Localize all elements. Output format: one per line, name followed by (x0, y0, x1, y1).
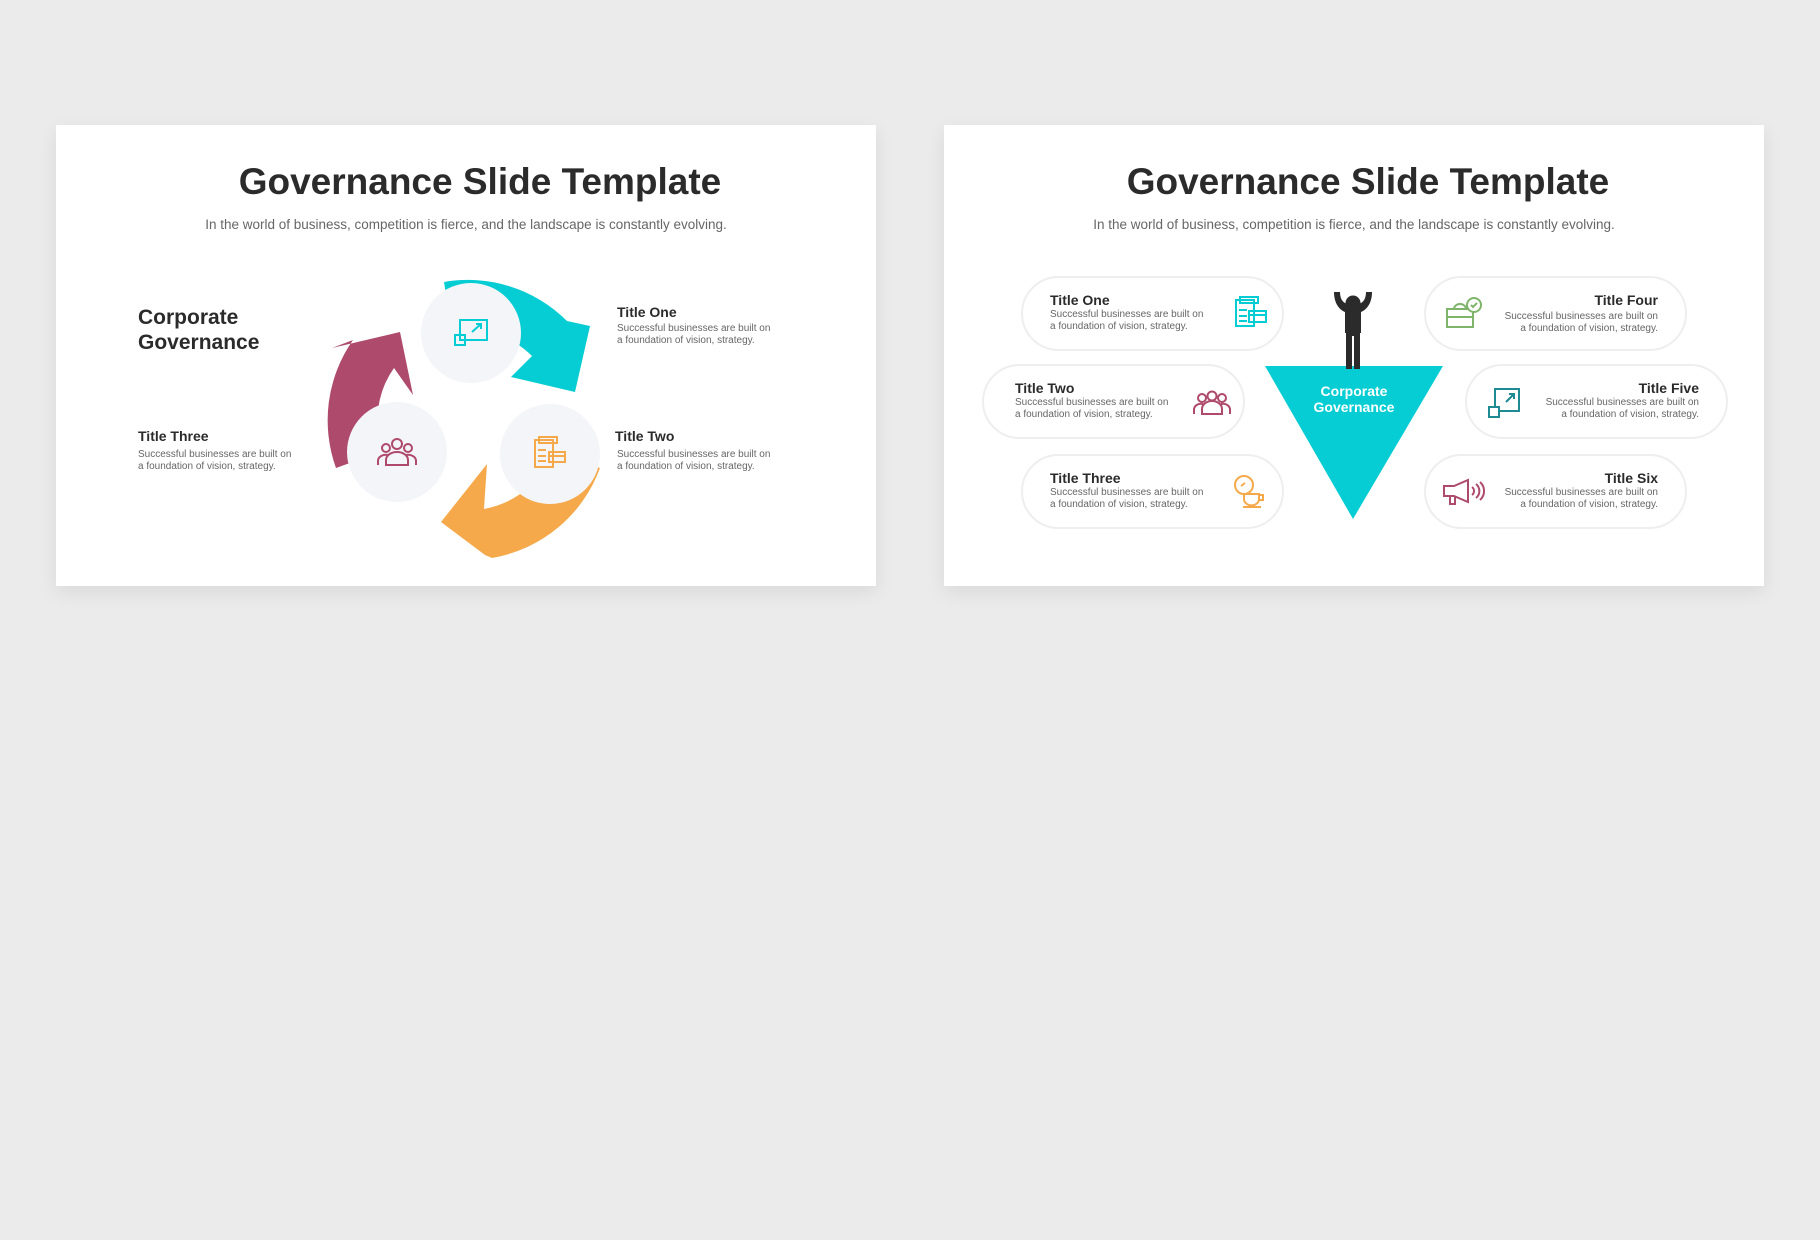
pill: title five: Successful businesses are built on (1546, 397, 1699, 408)
pill: title three: Title Three (1050, 470, 1121, 486)
icon: expand (1488, 388, 1520, 418)
circle: people icon (347, 402, 447, 502)
pill: title six: Successful businesses are built on (1505, 487, 1658, 498)
pill: title six: Title Six (1605, 470, 1658, 486)
subtitle left: In the world of business, competition is fierce, and the landscape is constantly evolving. (205, 217, 727, 232)
text: title three: Title Three (138, 428, 209, 444)
pill: title five: a foundation of vision, strategy. (1561, 409, 1699, 420)
circle: document icon (500, 404, 600, 504)
icon: people (1193, 390, 1231, 415)
arrow: magenta (328, 332, 413, 468)
pill: title five: Title Five (1639, 380, 1699, 396)
pill: title two: a foundation of vision, strategy. (1015, 409, 1153, 420)
subtitle right: In the world of business, competition is fierce, and the landscape is constantly evolving. (1093, 217, 1615, 232)
triangle: corporate governance (1265, 366, 1443, 519)
pill: title four (1424, 276, 1687, 351)
icon: person (1334, 292, 1372, 369)
text: title two: a foundation of vision, strategy. (617, 461, 755, 472)
pill: title one: Title One (1050, 292, 1110, 308)
triangle: corporate governance: Corporate (1321, 383, 1387, 399)
pill: title two: Successful businesses are built on (1015, 397, 1168, 408)
pill: title one: a foundation of vision, strategy. (1050, 321, 1188, 332)
pill: title two (982, 364, 1245, 439)
icon: briefcase clock (1446, 297, 1482, 328)
heading: Corporate Governance: Governance (138, 331, 259, 354)
panel: cycle slide (56, 125, 876, 586)
icon: coffee clock (1234, 475, 1264, 508)
pill: title four: Successful businesses are built on (1505, 311, 1658, 322)
text: title two (615, 428, 770, 472)
pill: title one (1021, 276, 1284, 351)
triangle: corporate governance: Governance (1314, 399, 1394, 415)
pill: title two: Title Two (1015, 380, 1074, 396)
icon: megaphone (1443, 478, 1486, 505)
text: title three: a foundation of vision, strategy. (138, 461, 276, 472)
text: title one (617, 304, 770, 346)
pill: title four: Title Four (1594, 292, 1658, 308)
text: title one: a foundation of vision, strategy. (617, 335, 755, 346)
panel: triangle slide (944, 125, 1764, 586)
pill: title one: Successful businesses are built on (1050, 309, 1203, 320)
arrow: teal (444, 280, 590, 392)
pill: title four: a foundation of vision, strategy. (1520, 323, 1658, 334)
pill: title six: a foundation of vision, strategy. (1520, 499, 1658, 510)
heading: Corporate Governance (138, 306, 259, 354)
title left: Governance Slide Template (239, 161, 721, 202)
text: title two: Title Two (615, 428, 674, 444)
title right: Governance Slide Template (1127, 161, 1609, 202)
text: title one: Title One (617, 304, 677, 320)
text: title two: Successful businesses are built on (617, 449, 770, 460)
heading: Corporate Governance: Corporate (138, 306, 238, 329)
pill: title three: a foundation of vision, strategy. (1050, 499, 1188, 510)
pill: title three: Successful businesses are built on (1050, 487, 1203, 498)
pill: title six (1424, 454, 1687, 529)
pill: title three (1021, 454, 1284, 529)
text: title three: Successful businesses are built on (138, 449, 291, 460)
text: title three (138, 428, 291, 472)
arrow: orange (441, 451, 600, 558)
icon: documents (1235, 296, 1267, 327)
text: title one: Successful businesses are built on (617, 323, 770, 334)
pill: title five (1465, 364, 1728, 439)
circle: top icon (421, 283, 521, 383)
